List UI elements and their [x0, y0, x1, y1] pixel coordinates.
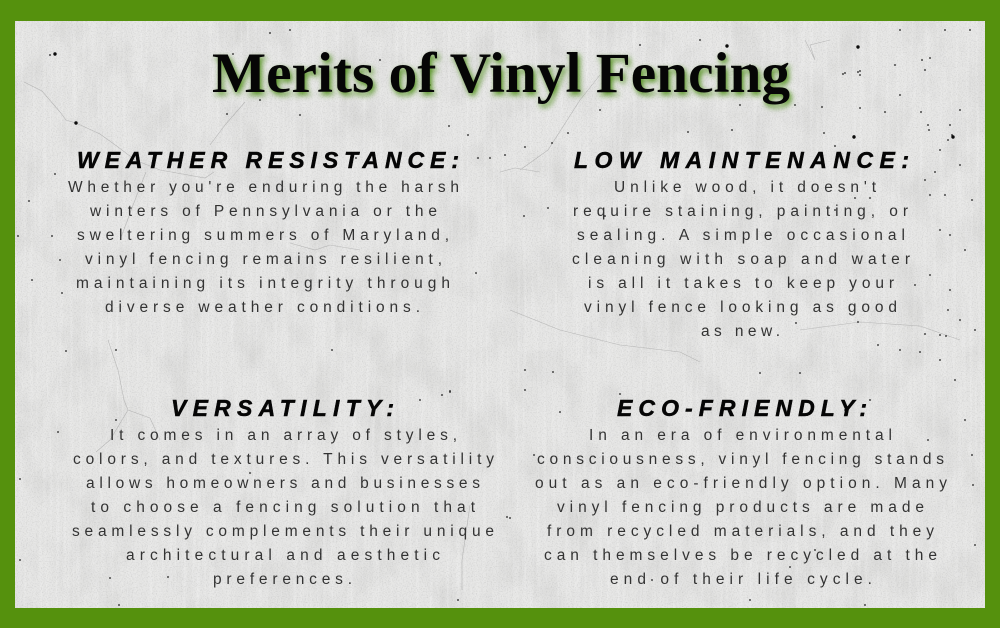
text block: weather resistance: maintaining its integrity through	[76, 275, 450, 292]
text block: low maintenance: vinyl fence looking as good	[584, 299, 897, 316]
text block: low maintenance: Unlike wood, it doesn't	[614, 179, 877, 196]
text block: weather resistance: diverse weather conditions.	[105, 299, 420, 316]
text block: eco-friendly: consciousness, vinyl fencing stands	[537, 451, 944, 468]
panel: low maintenance	[572, 147, 910, 340]
text block: weather resistance	[68, 179, 459, 316]
text block: versatility: architectural and aesthetic	[126, 547, 440, 564]
heading: versatility: VERSATILITY:	[171, 395, 394, 421]
text block: versatility: colors, and textures. This versatility	[73, 451, 494, 468]
text block: low maintenance: sealing. A simple occasional	[577, 227, 905, 244]
panel: weather resistance	[68, 147, 459, 316]
panel: eco-friendly	[535, 395, 947, 588]
text block: low maintenance: is all it takes to keep your	[588, 275, 894, 292]
text block: eco-friendly: from recycled materials, and they	[547, 523, 934, 540]
text block: eco-friendly: out as an eco-friendly option. Many	[535, 475, 947, 492]
heading: weather resistance: WEATHER RESISTANCE:	[77, 147, 459, 173]
text block: versatility: It comes in an array of styles,	[110, 427, 457, 444]
text block: eco-friendly	[535, 427, 947, 588]
text block: eco-friendly: can themselves be recycled at the	[544, 547, 937, 564]
text block: low maintenance	[572, 179, 910, 340]
text block: weather resistance: winters of Pennsylvania or the	[89, 203, 437, 220]
text block: low maintenance: cleaning with soap and water	[572, 251, 910, 268]
text block: versatility: preferences.	[213, 571, 352, 588]
text block: low maintenance: as new.	[701, 323, 780, 340]
text block: weather resistance: sweltering summers of Maryland,	[77, 227, 449, 244]
title: Merits of Vinyl Fencing	[212, 42, 790, 105]
text block: versatility: to choose a fencing solution that	[91, 499, 476, 516]
text block: eco-friendly: In an era of environmental	[589, 427, 892, 444]
text block: weather resistance: Whether you're enduring the harsh	[68, 179, 459, 196]
text block: weather resistance: vinyl fencing remains resilient,	[85, 251, 442, 268]
heading: low maintenance: LOW MAINTENANCE:	[574, 147, 909, 173]
text block: eco-friendly: vinyl fencing products are made	[557, 499, 924, 516]
panel: versatility	[72, 395, 494, 588]
text block: versatility: allows homeowners and businesses	[86, 475, 480, 492]
text block: low maintenance: require staining, painting, or	[573, 203, 908, 220]
text block: versatility	[72, 427, 494, 588]
text block: eco-friendly: end of their life cycle.	[610, 571, 872, 588]
heading: eco-friendly: ECO-FRIENDLY:	[617, 395, 867, 421]
text block: versatility: seamlessly complements their unique	[72, 523, 494, 540]
